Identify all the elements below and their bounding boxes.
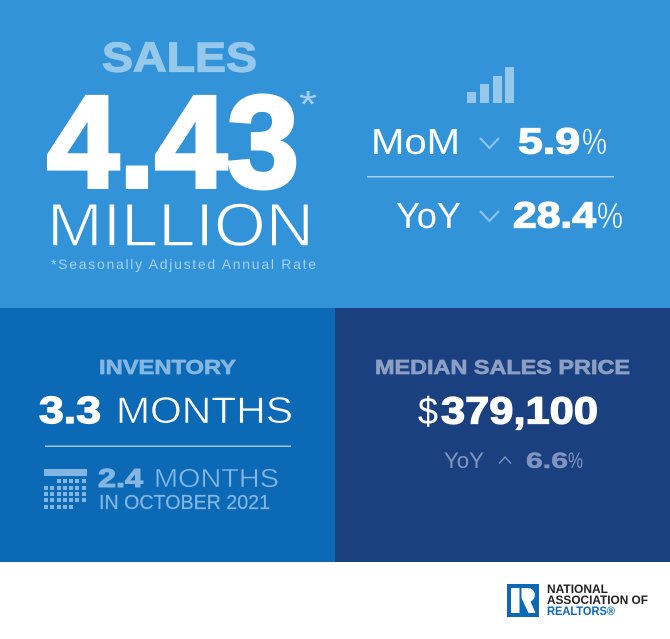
value: price: $: [418, 391, 438, 433]
heading: sales: SALES: [102, 34, 257, 80]
big number: 4.43: 4.43: [47, 68, 299, 215]
text: 2.4 months in october 2021: 2.4: [98, 463, 144, 493]
stat: year over year: YoY: [396, 195, 461, 236]
asterisk: *: [299, 84, 317, 126]
text: organization name: ASSOCIATION OF: [547, 595, 648, 607]
stat: year over year price: 6.6: [526, 448, 568, 473]
text: organization name: REALTORS®: [547, 606, 615, 618]
stat: year over year price: [444, 448, 583, 473]
stat: month over month: 5.9: [518, 120, 580, 162]
heading: median sales price: MEDIAN SALES PRICE: [375, 357, 630, 379]
stat: month over month: [371, 120, 607, 162]
icon: R mark: [507, 584, 539, 617]
footnote: *Seasonally Adjusted Annual Rate: [51, 256, 316, 272]
panel: median sales price: [335, 308, 670, 562]
value: price: 379,100: [441, 390, 598, 432]
text: million: MILLION: [47, 191, 314, 259]
stat: month over month: MoM: [371, 121, 460, 162]
value: 3.3 months: 3.3: [39, 390, 101, 432]
value: 3.3 months: [39, 390, 293, 432]
stat: year over year: [396, 194, 623, 236]
icon: bar chart: [467, 67, 514, 103]
text: organization name: NATIONAL: [547, 584, 608, 596]
text: 2.4 months in october 2021: [98, 463, 279, 514]
stat: year over year price: YoY: [444, 448, 484, 473]
stat: year over year: %: [597, 195, 623, 236]
panel: sales: [0, 0, 670, 308]
icon: calendar: [44, 469, 87, 509]
heading: inventory: INVENTORY: [99, 357, 237, 379]
text: 2.4 months in october 2021: MONTHS: [154, 463, 279, 493]
value: 3.3 months: MONTHS: [116, 390, 293, 431]
logo: national association of realtors: [507, 584, 648, 618]
text: organization name: [547, 584, 648, 618]
stat: year over year price: %: [568, 448, 583, 473]
stat: year over year: 28.4: [513, 194, 596, 236]
panel: inventory: [0, 308, 335, 562]
text: 2.4 months in october 2021: IN OCTOBER 2021: [99, 492, 270, 514]
stat: month over month: %: [582, 121, 607, 162]
